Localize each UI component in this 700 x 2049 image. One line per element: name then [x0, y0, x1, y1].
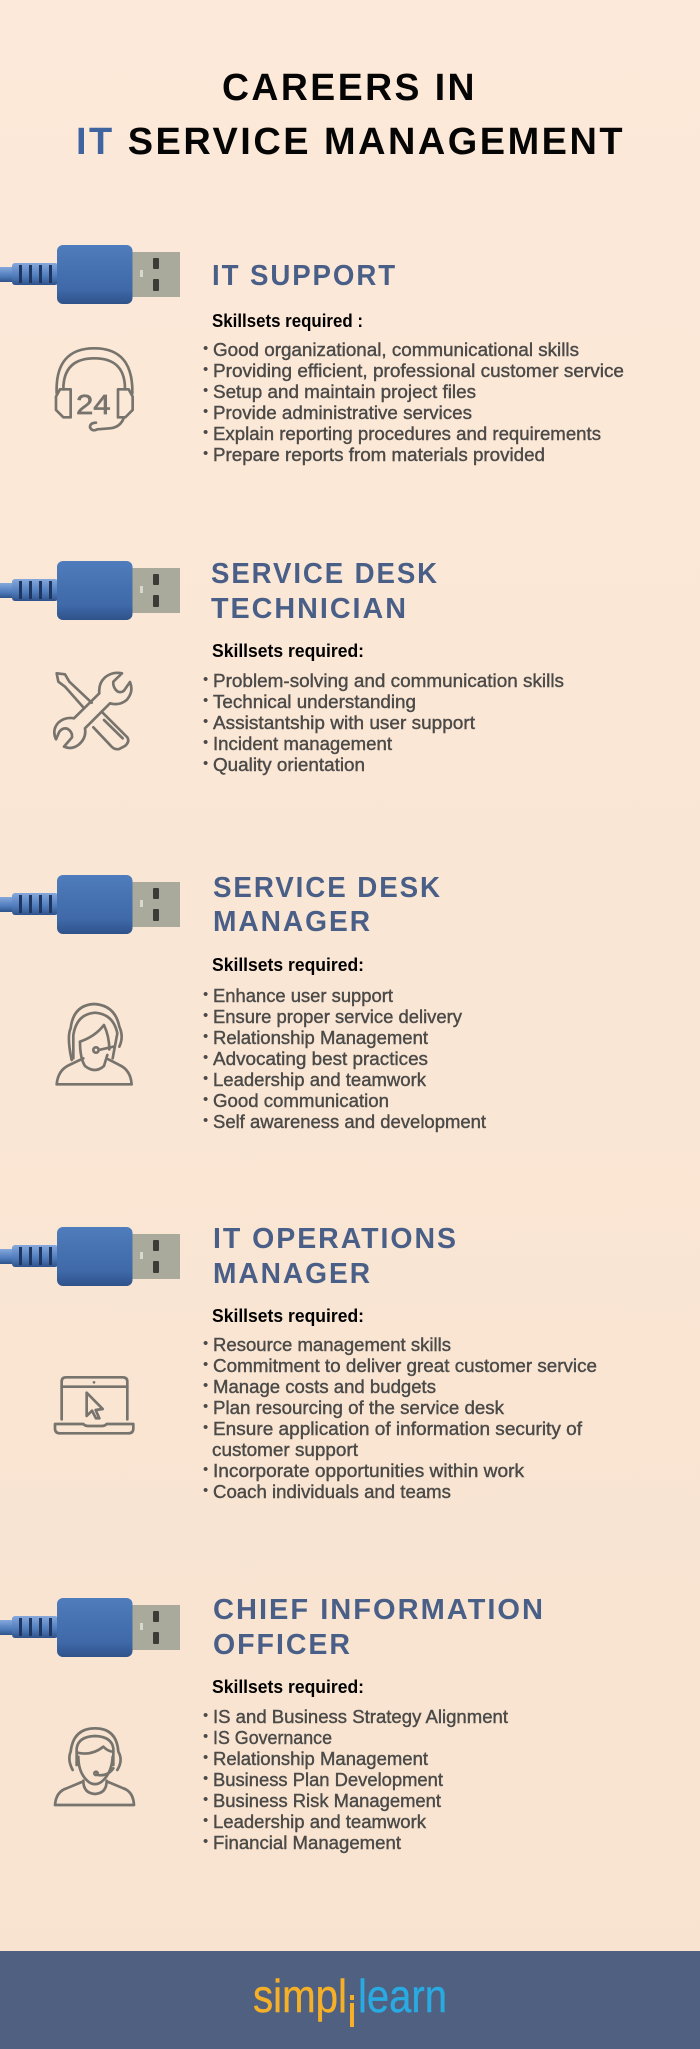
skill list: Good communication [213, 1090, 389, 1111]
panel: IT support [0, 245, 624, 465]
skill list: • [203, 986, 208, 1003]
skill list: • [203, 1812, 208, 1829]
heading: chief information officer [213, 1594, 545, 1661]
skill list: Manage costs and budgets [213, 1376, 436, 1397]
icon: 24 hour headset: 24 [76, 389, 111, 420]
icon: USB plug [0, 1227, 180, 1286]
icon: USB plug [0, 245, 180, 304]
skillsets label: Skillsets required: [212, 954, 364, 975]
skill list: • [203, 445, 208, 462]
title [76, 67, 625, 163]
skill list: • [203, 1049, 208, 1066]
skill list: Ensure proper service delivery [213, 1006, 463, 1027]
skill list [203, 670, 564, 775]
skill list: Providing efficient, professional customer service [213, 360, 624, 381]
skill list: Leadership and teamwork [213, 1811, 427, 1832]
skill list: Assistantship with user support [213, 712, 475, 733]
skillsets label: Skillsets required: [212, 1676, 364, 1697]
icon: USB plug [0, 1598, 180, 1657]
skill list: Incorporate opportunities within work [213, 1460, 525, 1481]
skill list: • [203, 1707, 208, 1724]
icon: USB plug [0, 875, 180, 934]
panel: service desk manager [0, 872, 486, 1132]
skillsets label: Skillsets required: [212, 1305, 364, 1326]
skill list: • [203, 1728, 208, 1745]
skill list: • [203, 1007, 208, 1024]
skill list: • [203, 1028, 208, 1045]
skill list: IS Governance [213, 1727, 332, 1748]
heading: IT operations manager: MANAGER [213, 1258, 372, 1290]
skill list: • [203, 382, 208, 399]
skill list: • [203, 692, 208, 709]
skill list: • [203, 713, 208, 730]
heading: service desk manager: SERVICE DESK [213, 872, 442, 904]
skill list: Explain reporting procedures and requirements [213, 423, 601, 444]
panel: IT operations manager [0, 1223, 597, 1502]
skill list: Problem-solving and communication skills [213, 670, 564, 691]
skill list: Business Plan Development [213, 1769, 443, 1790]
skill list: IS and Business Strategy Alignment [213, 1706, 508, 1727]
heading: chief information officer: CHIEF INFORMATION [213, 1594, 545, 1626]
skill list [203, 1334, 597, 1502]
icon: tools [54, 673, 131, 749]
skill list: Quality orientation [213, 754, 365, 775]
heading: IT operations manager: IT OPERATIONS [213, 1223, 458, 1255]
skill list: Relationship Management [213, 1748, 428, 1769]
icon: woman with headset [57, 1004, 132, 1084]
logo: simplilearn [253, 1970, 447, 2027]
heading: service desk technician: TECHNICIAN [211, 593, 408, 625]
panel: service desk technician [0, 558, 564, 775]
icon: USB plug [0, 561, 180, 620]
icon: laptop with cursor [55, 1377, 133, 1433]
skill list: • [203, 1749, 208, 1766]
logo: simplilearn: simpl [253, 1970, 347, 2022]
skill list: Ensure application of information security of [213, 1418, 583, 1439]
skill list [203, 1706, 508, 1853]
skill list: Prepare reports from materials provided [213, 444, 545, 465]
icon: 24 hour headset [56, 348, 133, 430]
skill list: • [203, 1398, 208, 1415]
skill list: Commitment to deliver great customer service [213, 1355, 597, 1376]
footer band [0, 1951, 700, 2049]
panel: chief information officer [0, 1594, 545, 1853]
skill list: Financial Management [213, 1832, 401, 1853]
skill list: • [203, 1377, 208, 1394]
skill list: • [203, 1112, 208, 1129]
skill list: • [203, 424, 208, 441]
skill list: Relationship Management [213, 1027, 428, 1048]
skill list: Technical understanding [213, 691, 416, 712]
skill list: • [203, 1482, 208, 1499]
skill list: • [203, 755, 208, 772]
skill list: • [203, 361, 208, 378]
skill list: • [203, 1335, 208, 1352]
skill list: • [203, 671, 208, 688]
skill list: • [203, 1356, 208, 1373]
icon: man with headset [55, 1728, 134, 1805]
skill list: Advocating best practices [213, 1048, 428, 1069]
skill list: Good organizational, communicational skills [213, 339, 579, 360]
skill list: Resource management skills [213, 1334, 451, 1355]
skill list: Provide administrative services [213, 402, 472, 423]
heading: service desk technician [211, 558, 439, 625]
skill list: Leadership and teamwork [213, 1069, 427, 1090]
skill list: Incident management [213, 733, 392, 754]
skill list: • [203, 1833, 208, 1850]
logo: simplilearn: learn [358, 1970, 447, 2022]
skill list: Coach individuals and teams [213, 1481, 451, 1502]
skill list: Setup and maintain project files [213, 381, 476, 402]
skill list: Self awareness and development [213, 1111, 486, 1132]
skill list: customer support [212, 1439, 358, 1460]
skill list: Plan resourcing of the service desk [213, 1397, 505, 1418]
heading: IT operations manager [213, 1223, 458, 1290]
skill list: • [203, 734, 208, 751]
skill list: Enhance user support [213, 985, 393, 1006]
title: IT SERVICE MANAGEMENT [76, 121, 625, 163]
skill list: • [203, 340, 208, 357]
heading: IT support: IT SUPPORT [212, 260, 397, 292]
title: CAREERS IN [222, 67, 477, 109]
skill list: • [203, 1070, 208, 1087]
skill list: • [203, 1791, 208, 1808]
heading: service desk manager [213, 872, 442, 938]
heading: service desk manager: MANAGER [213, 906, 372, 938]
skill list: • [203, 403, 208, 420]
heading: service desk technician: SERVICE DESK [211, 558, 439, 590]
skillsets label: Skillsets required : [212, 310, 363, 331]
skill list: • [203, 1770, 208, 1787]
skill list: • [203, 1461, 208, 1478]
skill list: • [203, 1091, 208, 1108]
heading: chief information officer: OFFICER [213, 1629, 352, 1661]
skillsets label: Skillsets required: [212, 640, 364, 661]
skill list [203, 985, 486, 1132]
skill list [203, 339, 624, 465]
skill list: Business Risk Management [213, 1790, 441, 1811]
skill list: • [203, 1419, 208, 1436]
